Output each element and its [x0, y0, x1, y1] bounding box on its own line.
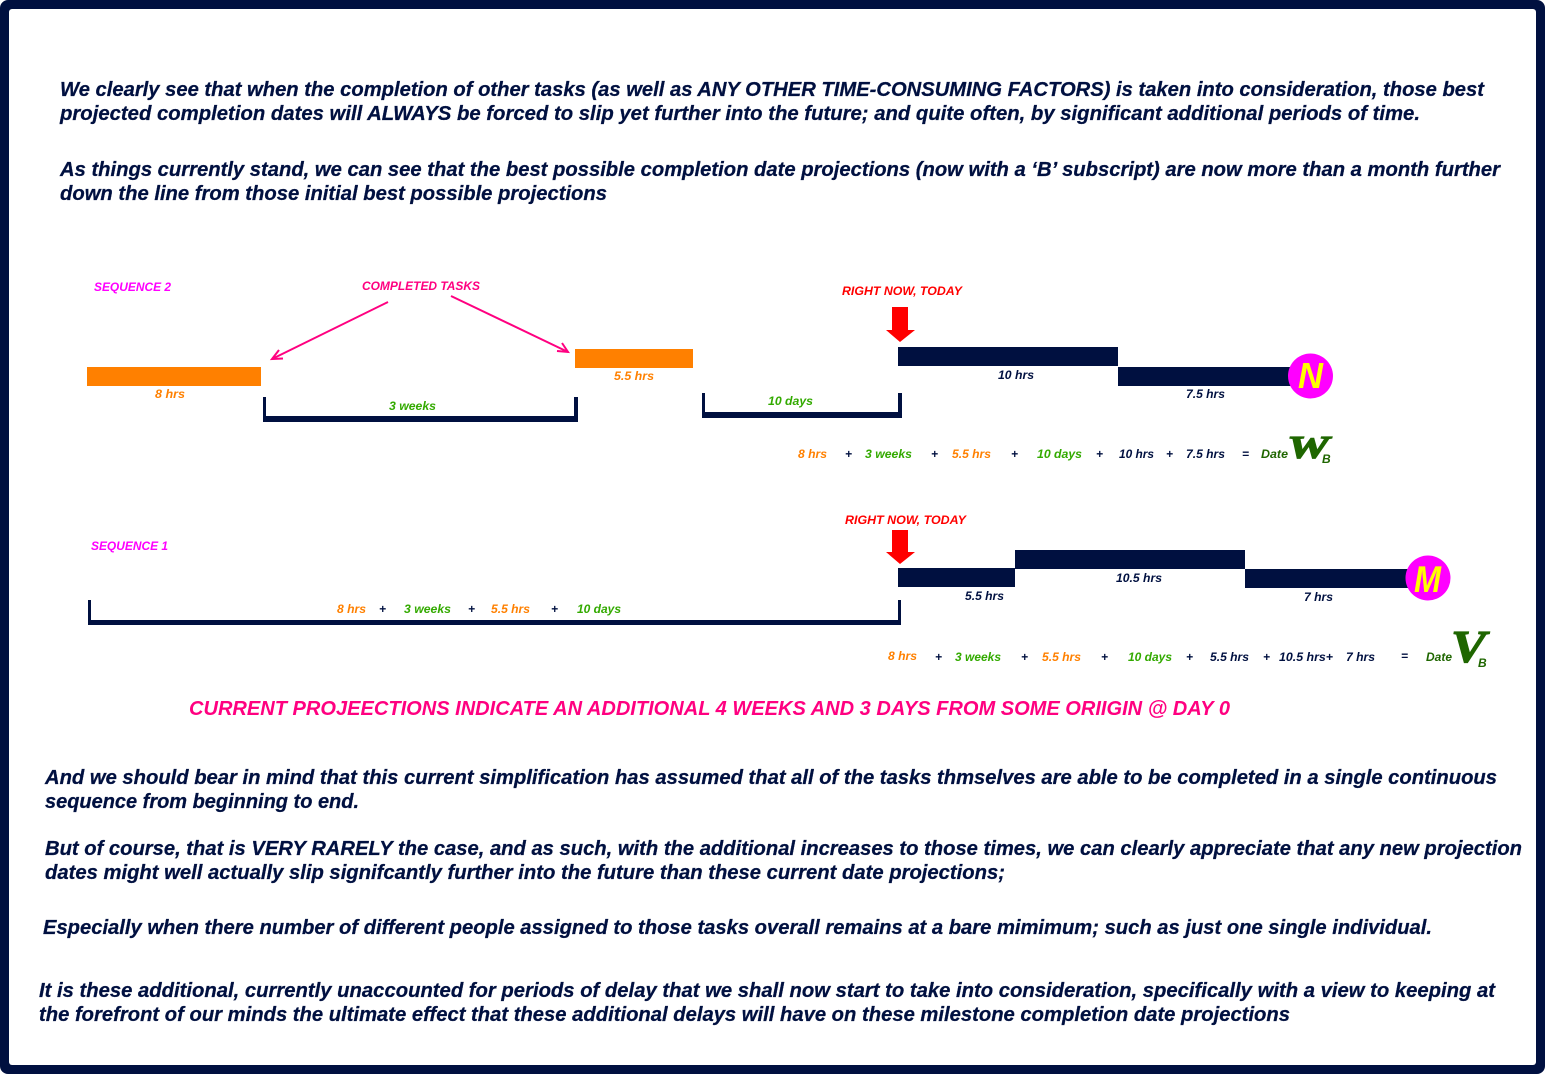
- closing text block 1: sequence from beginning to end.: [45, 791, 359, 813]
- sequence 2 diagram: [87, 279, 1333, 466]
- remaining task bar: 7.5 hrs: [1118, 367, 1300, 386]
- equation: date V: +: [935, 650, 942, 664]
- equation: date V: +: [1101, 650, 1108, 664]
- equation: date W: +: [931, 447, 938, 461]
- intro text block 1: We clearly see that when the completion of other tasks (as well as ANY OTHER TIME-CONSUMING FACTORS) is taken into consideration, those best: [60, 79, 1485, 101]
- label: 5.5 hrs: 5.5 hrs: [614, 369, 654, 383]
- label: 7.5 hrs: 7.5 hrs: [1186, 387, 1225, 401]
- equation: date V: 8 hrs: [888, 649, 917, 663]
- icon: red down arrow: [886, 307, 915, 342]
- equation: date W: +: [1166, 447, 1173, 461]
- completed task bar: 8 hrs: [87, 367, 261, 386]
- closing text block 2: But of course, that is VERY RARELY the case, and as such, with the additional increases to those times, we can clearly appreciate that any new projection: [45, 838, 1522, 860]
- intro text block 2: down the line from those initial best possible projections: [60, 183, 607, 205]
- milestone N: N: [1298, 355, 1324, 396]
- milestone M: [1406, 556, 1450, 600]
- bracket labels: 5.5 hrs: [491, 602, 530, 616]
- equation: date W: +: [845, 447, 852, 461]
- equation: date W: 7.5 hrs: [1186, 447, 1225, 461]
- arrow: to second completed task: [451, 296, 568, 352]
- equation: date V: Date: [1426, 650, 1452, 664]
- intro text block 1: projected completion dates will ALWAYS be forced to slip yet further into the future; and quite often, by significant additional periods of time.: [59, 103, 1420, 125]
- closing text block 4: [39, 980, 1496, 1026]
- label: 3 weeks: 3 weeks: [389, 399, 436, 413]
- equation: date W: =: [1242, 447, 1249, 461]
- label: 7 hrs: 7 hrs: [1304, 590, 1333, 604]
- bracket labels: +: [379, 602, 386, 616]
- label: 10.5 hrs: 10.5 hrs: [1116, 571, 1162, 585]
- equation: date V: 7 hrs: [1346, 650, 1375, 664]
- remaining task bar: 10 hrs: [898, 347, 1118, 366]
- equation: date V: +: [1021, 650, 1028, 664]
- equation: date W: 5.5 hrs: [952, 447, 991, 461]
- sequence 1 label: SEQUENCE 1: [91, 539, 168, 553]
- equation: date W: Date: [1261, 447, 1288, 461]
- closing text block 4: It is these additional, currently unaccounted for periods of delay that we shall now start to take into consideration, specifically with a view to keeping at: [39, 980, 1496, 1002]
- remaining task bar: 10.5 hrs: [1015, 550, 1245, 569]
- equation: date V: 5.5 hrs: [1210, 650, 1249, 664]
- bracket labels: [337, 602, 621, 616]
- icon: red down arrow: [886, 530, 915, 564]
- equation: date W: B: [1322, 452, 1331, 466]
- bracket labels: +: [551, 602, 558, 616]
- equation: date W: 10 days: [1037, 447, 1082, 461]
- equation: date W: +: [1011, 447, 1018, 461]
- right now label: RIGHT NOW, TODAY: [842, 284, 963, 298]
- closing text block 2: [45, 838, 1522, 884]
- intro text block 2: [59, 159, 1501, 205]
- closing text block 3: Especially when there number of different people assigned to those tasks overall remains at a bare mimimum; such as just one single individual.: [43, 917, 1432, 939]
- headline callout: CURRENT PROJEECTIONS INDICATE AN ADDITIONAL 4 WEEKS AND 3 DAYS FROM SOME ORIIGIN @ DAY 0: [189, 698, 1230, 720]
- equation: date V: 10 days: [1128, 650, 1172, 664]
- equation: date V: [888, 621, 1490, 672]
- milestone M: M: [1414, 559, 1442, 600]
- arrow: to first completed task: [272, 302, 388, 359]
- bracket: all elapsed time: [88, 600, 901, 625]
- equation: date V: =: [1401, 649, 1408, 663]
- completed tasks label: COMPLETED TASKS: [362, 279, 480, 293]
- equation: date V: V: [1451, 621, 1490, 672]
- intro text block 2: As things currently stand, we can see that the best possible completion date projections (now with a ‘B’ subscript) are now more than a month further: [59, 159, 1501, 181]
- label: 10 days: 10 days: [768, 394, 813, 408]
- bracket labels: 3 weeks: [404, 602, 451, 616]
- closing text block 2: dates might well actually slip signifcantly further into the future than these current date projections;: [45, 862, 1005, 884]
- milestone N: [1288, 354, 1333, 398]
- right now label: RIGHT NOW, TODAY: [845, 513, 967, 527]
- bracket labels: 10 days: [577, 602, 621, 616]
- equation: date V: 5.5 hrs: [1042, 650, 1081, 664]
- bracket: 3 weeks: [263, 397, 578, 422]
- label: 5.5 hrs: 5.5 hrs: [965, 589, 1004, 603]
- bracket labels: 8 hrs: [337, 602, 366, 616]
- equation: date V: +: [1263, 650, 1270, 664]
- closing text block 4: the forefront of our minds the ultimate effect that these additional delays will have on these milestone completion date projections: [39, 1004, 1290, 1026]
- equation: date W: W: [1287, 429, 1333, 465]
- sequence 1 diagram: [88, 513, 1490, 672]
- equation: date W: 10 hrs: [1119, 447, 1154, 461]
- equation: date W: 3 weeks: [865, 447, 912, 461]
- closing text block 1: And we should bear in mind that this current simplification has assumed that all of the tasks thmselves are able to be completed in a single continuous: [44, 767, 1497, 789]
- intro text block 1: [59, 79, 1485, 125]
- equation: date W: 8 hrs: [798, 447, 827, 461]
- label: 10 hrs: 10 hrs: [998, 368, 1034, 382]
- equation: date V: B: [1478, 656, 1487, 670]
- remaining task bar: 5.5 hrs: [898, 568, 1015, 587]
- equation: date W: [798, 429, 1333, 466]
- remaining task bar: 7 hrs: [1245, 569, 1415, 588]
- label: 8 hrs: 8 hrs: [155, 387, 185, 401]
- completed task bar: 5.5 hrs: [575, 349, 693, 368]
- bracket labels: +: [468, 602, 475, 616]
- bracket: 10 days: [702, 393, 902, 418]
- equation: date V: 10.5 hrs+: [1279, 650, 1333, 664]
- equation: date V: +: [1186, 650, 1193, 664]
- sequence 2 label: SEQUENCE 2: [94, 280, 171, 294]
- equation: date V: 3 weeks: [955, 650, 1001, 664]
- equation: date W: +: [1096, 447, 1103, 461]
- closing text block 1: [44, 767, 1497, 813]
